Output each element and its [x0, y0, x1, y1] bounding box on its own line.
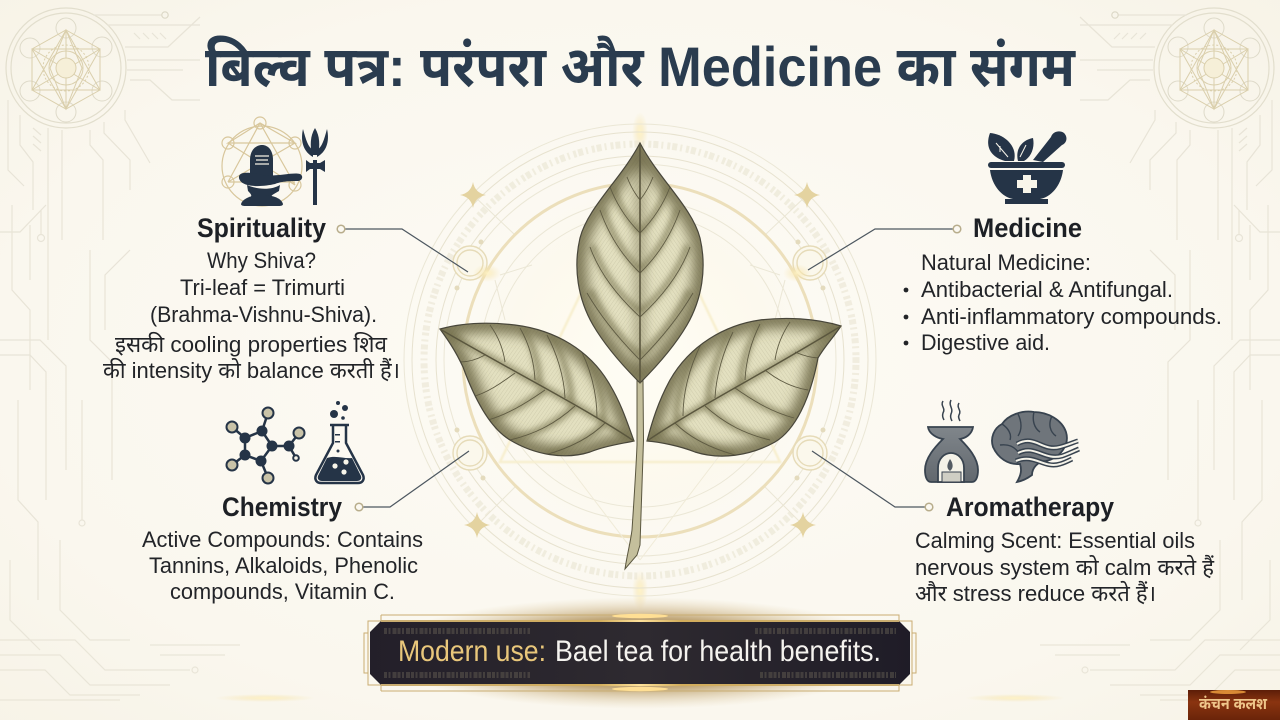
text: aromatherapy body: Calming Scent: Essential oils: [915, 528, 1195, 553]
icon: flask: [315, 401, 364, 483]
text: spirituality body: की intensity को balance करती हैं।: [103, 357, 400, 383]
icon: mortar, pestle and herbs: [988, 131, 1066, 204]
icon: brain with scent waves: [992, 412, 1079, 482]
panel: chemistry: [142, 401, 423, 604]
connector: medicine: [808, 225, 961, 270]
panel: spirituality: [103, 117, 400, 383]
heading: chemistry: Chemistry: [222, 492, 342, 522]
connector: chemistry: [355, 451, 469, 511]
stem: [625, 380, 644, 569]
circuit pattern bottom left: [0, 540, 240, 700]
text: spirituality body: इसकी cooling properties शिव: [115, 331, 387, 357]
text: medicine body: Digestive aid.: [921, 330, 1050, 355]
text: chemistry body: Tannins, Alkaloids, Phenolic: [149, 553, 418, 578]
title: बिल्व पत्र: परंपरा और Medicine का संगम: [205, 35, 1076, 98]
circuit pattern bottom right: [1040, 540, 1280, 700]
text: chemistry body: [142, 527, 423, 604]
central sacred geometry mandala: [404, 112, 876, 610]
top leaf: [570, 140, 710, 385]
connector: spirituality: [337, 225, 468, 272]
heading: spirituality: Spirituality: [197, 213, 326, 243]
icon: shiva lingam with trident: [222, 117, 328, 206]
text: aromatherapy body: nervous system को calm करते हैं: [915, 554, 1215, 580]
text: aromatherapy body: [915, 528, 1215, 606]
text: medicine body: Antibacterial & Antifungal.: [921, 277, 1173, 302]
callout: modern use banner: [364, 597, 916, 709]
connector: aromatherapy: [812, 451, 933, 511]
logo badge: कंचन कलश: [1199, 695, 1268, 713]
text: spirituality body: [103, 248, 400, 383]
icon: oil diffuser: [925, 400, 978, 482]
circuit pattern and sacred geometry top left: [0, 8, 200, 600]
bottom gold glints: [215, 694, 1065, 702]
logo badge: [1188, 690, 1280, 720]
central bael tri-leaf illustration: [435, 140, 845, 569]
text: chemistry body: Active Compounds: Contains: [142, 527, 423, 552]
text: spirituality body: Tri-leaf = Trimurti: [180, 275, 345, 300]
circuit pattern and sacred geometry top right: [1080, 8, 1280, 600]
text: medicine body: [904, 250, 1222, 355]
banner text: Modern use:: [398, 635, 546, 668]
left leaf: [439, 322, 635, 456]
text: chemistry body: compounds, Vitamin C.: [170, 579, 395, 604]
heading: aromatherapy: Aromatherapy: [946, 492, 1114, 522]
text: spirituality body: (Brahma-Vishnu-Shiva).: [150, 302, 377, 327]
text: medicine body: Anti-inflammatory compounds.: [921, 304, 1222, 329]
banner text: Bael tea for health benefits.: [555, 635, 881, 668]
text: aromatherapy body: और stress reduce करते हैं।: [915, 580, 1156, 606]
text: spirituality body: Why Shiva?: [207, 248, 316, 273]
panel: medicine: [904, 131, 1222, 355]
text: medicine body: Natural Medicine:: [921, 250, 1091, 275]
icon: molecule: [226, 408, 304, 484]
panel: aromatherapy: [915, 400, 1215, 606]
heading: medicine: Medicine: [973, 213, 1082, 243]
right leaf: [646, 318, 842, 457]
